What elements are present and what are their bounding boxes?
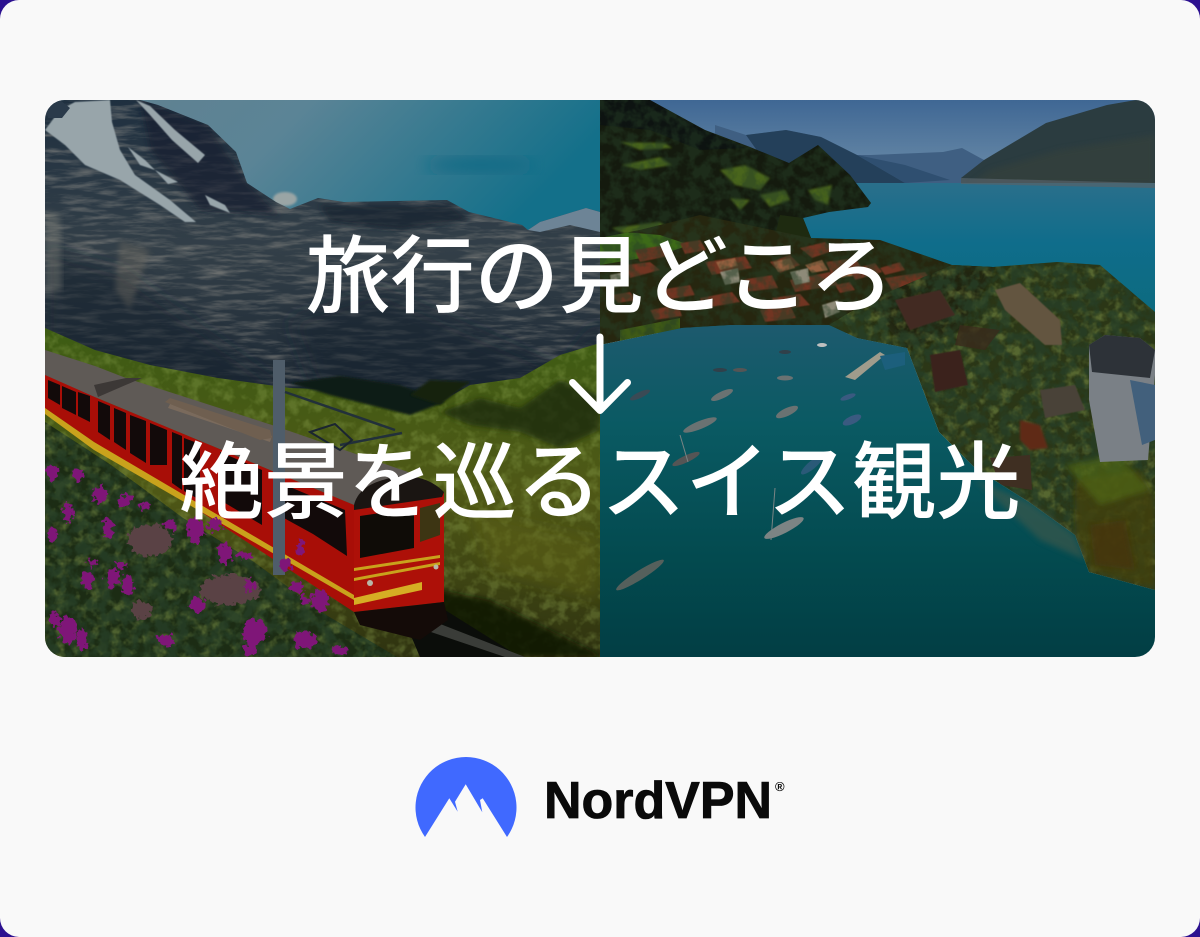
hillside conifer forest [290, 376, 445, 415]
arrow down [572, 337, 628, 410]
left forested hillside [600, 100, 871, 238]
undercarriage [354, 602, 448, 640]
flower meadow [45, 422, 400, 657]
wooded peninsula land [829, 262, 1155, 590]
icon: NordVPN mountain [415, 757, 516, 837]
left photo: Alpine mountain and train [45, 100, 600, 657]
faded pink blooms [128, 524, 260, 619]
cab windows [360, 514, 414, 558]
cab roof [354, 476, 444, 510]
sky [650, 100, 1155, 160]
headline line 1: 旅行の見どころ [306, 230, 894, 324]
magenta fireweed flowers [46, 464, 348, 657]
track and ballast [412, 611, 511, 657]
NordVPN logo [415, 757, 785, 837]
registered mark: ® [775, 779, 785, 794]
lower lake [600, 325, 1155, 657]
green meadow [45, 328, 600, 657]
right mountain [961, 100, 1155, 185]
wordmark: NordVPN [544, 772, 772, 830]
catenary mast [273, 360, 285, 575]
headline line 2: 絶景を巡るスイス観光 [179, 436, 1021, 530]
train body [45, 375, 354, 612]
shadow across meadow [430, 590, 600, 657]
right photo: lake village [600, 100, 1155, 657]
village [600, 215, 993, 348]
train [45, 350, 448, 640]
snowy distant peak [528, 208, 600, 232]
jetty [845, 352, 885, 380]
snow and glacier [45, 100, 230, 222]
hero photo panel [45, 100, 1155, 657]
side windows [48, 380, 347, 556]
upper lake [658, 183, 1155, 333]
train roof [45, 350, 444, 505]
distant mountains [715, 125, 1000, 185]
boats [614, 343, 863, 594]
hotel building [1089, 335, 1155, 462]
mountain [45, 100, 600, 400]
sky [45, 100, 600, 240]
yellow stripes [45, 408, 354, 600]
